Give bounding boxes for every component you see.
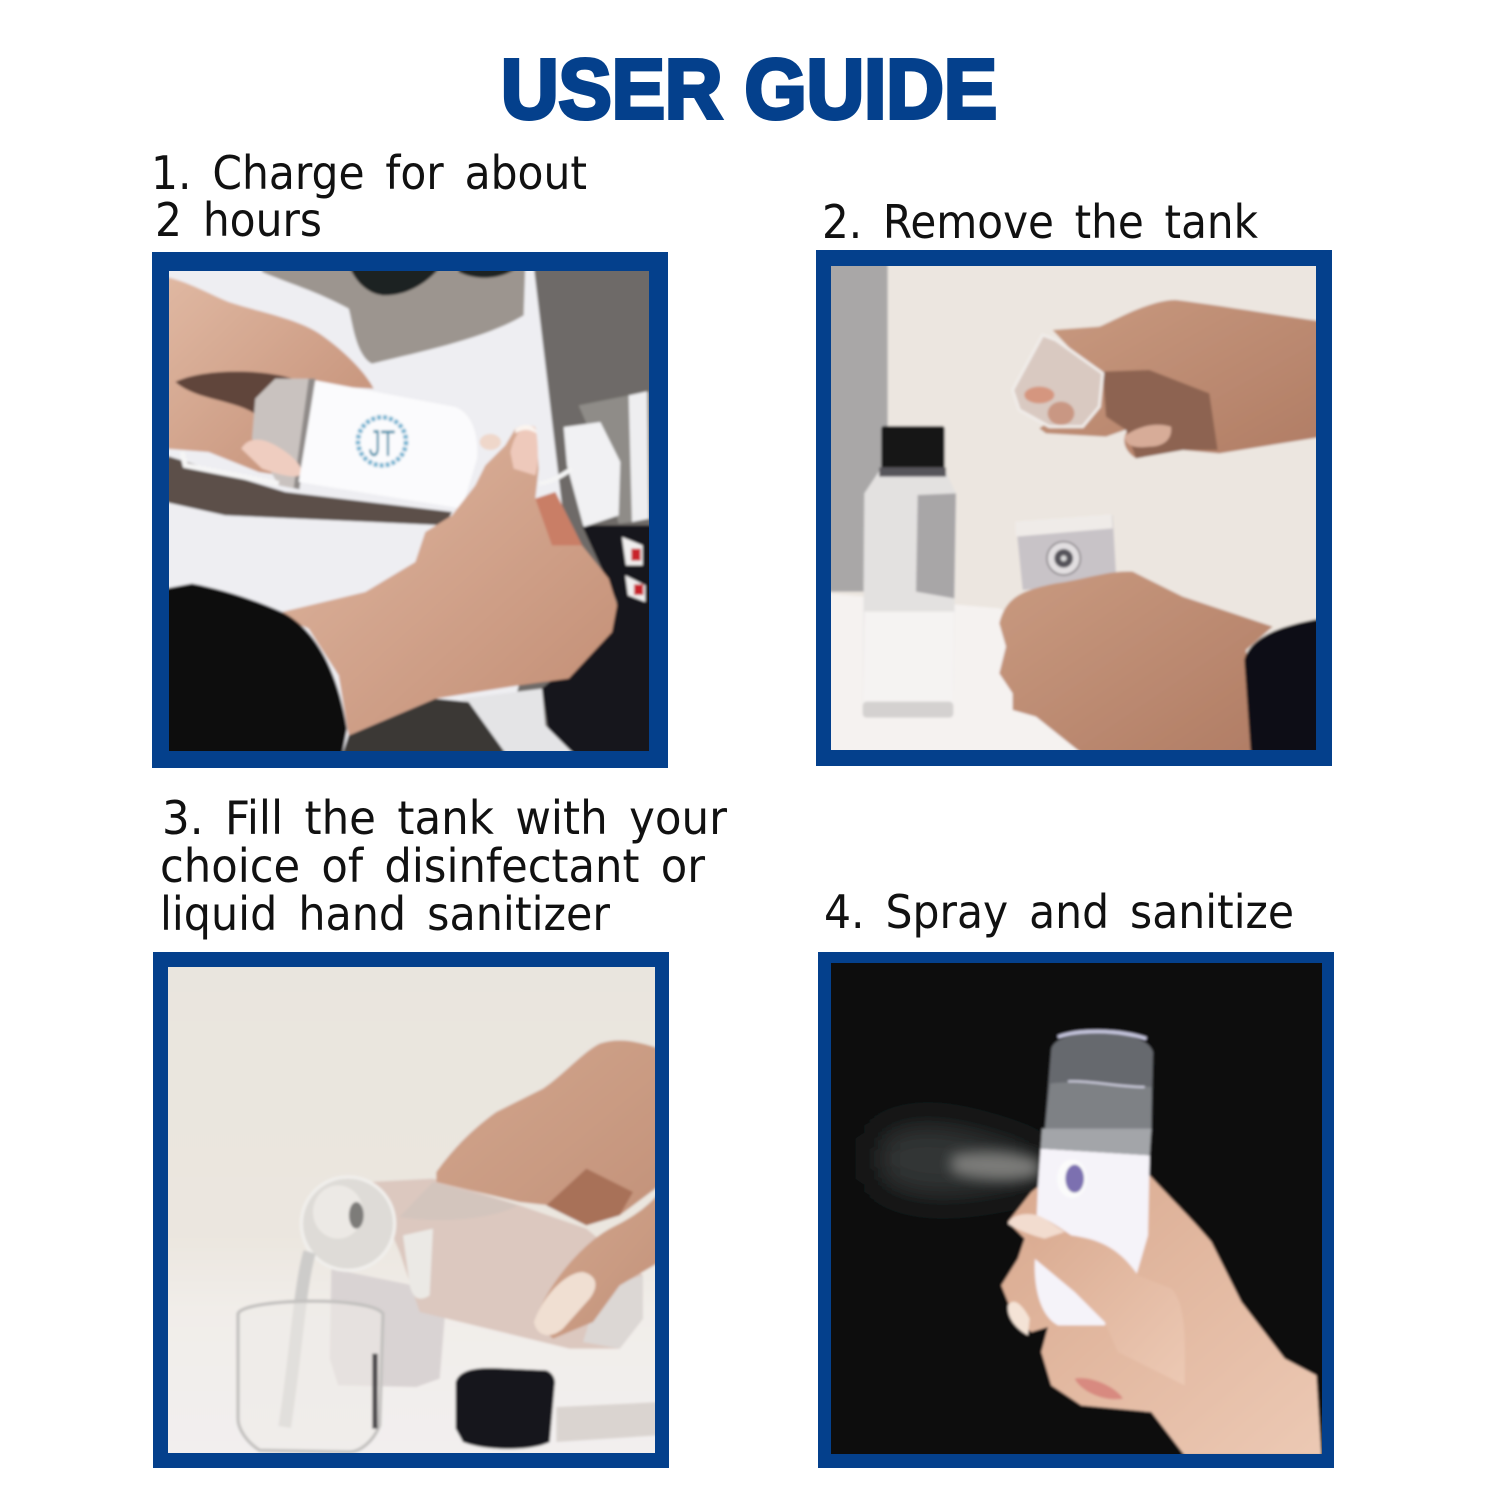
upper hand <box>165 277 374 479</box>
glass tank <box>1013 335 1103 427</box>
bottle <box>863 426 956 718</box>
heading: step 1: 2 hours <box>155 193 322 247</box>
index finger through bottle <box>405 1185 510 1218</box>
panel: step 2 photo, removing tank <box>816 250 1332 766</box>
sleeve <box>1243 618 1316 750</box>
device shadow <box>165 455 452 525</box>
device cap <box>1045 1032 1153 1132</box>
white device behind <box>330 1269 445 1387</box>
poured liquid <box>285 1252 310 1427</box>
hand behind device <box>1001 1175 1321 1455</box>
thumb <box>543 1196 655 1340</box>
bottle body <box>370 1179 643 1349</box>
logo: JT <box>369 423 395 464</box>
thumb and palm <box>1021 1214 1185 1385</box>
heading: step 3: choice of disinfectant or <box>160 839 705 893</box>
tank <box>252 379 315 489</box>
grey strip <box>826 260 888 592</box>
heading: step 2: 2. Remove the tank <box>822 195 1258 249</box>
mist <box>878 1124 1040 1197</box>
neck <box>301 1177 395 1270</box>
heading: step 3 <box>160 791 727 941</box>
shadow on table <box>262 265 525 364</box>
panel: step 4 photo, spraying <box>818 952 1334 1468</box>
strap <box>180 458 280 485</box>
cable <box>556 468 570 480</box>
lower hand <box>999 571 1273 757</box>
small fingertip <box>480 434 501 450</box>
title: USER GUIDE <box>501 42 997 136</box>
panel: step 1 photo, charging <box>152 252 668 768</box>
wall <box>516 271 649 728</box>
dark lower right <box>542 525 655 755</box>
socket <box>579 392 655 524</box>
lower hand <box>275 426 617 735</box>
black cap <box>456 1368 555 1449</box>
device <box>299 380 477 509</box>
device <box>1016 527 1116 591</box>
hand <box>436 1041 660 1225</box>
logo <box>358 417 406 465</box>
table <box>831 594 1078 750</box>
nails <box>1008 1214 1065 1239</box>
heading: step 1: 1. Charge for about <box>151 146 587 200</box>
heading: step 1 <box>151 146 587 247</box>
nail <box>241 440 303 476</box>
heading: step 4: 4. Spray and sanitize <box>824 885 1294 939</box>
glass tank <box>238 1301 383 1452</box>
heading: step 3: liquid hand sanitizer <box>160 887 610 941</box>
shadow on table <box>556 1402 660 1442</box>
device body <box>1035 1149 1150 1325</box>
heading: step 3: 3. Fill the tank with your <box>162 791 727 845</box>
nozzle <box>1057 1159 1087 1198</box>
collar <box>1041 1129 1151 1155</box>
sleeve <box>165 584 347 755</box>
upper hand <box>1039 300 1323 458</box>
panel: step 3 photo, filling tank <box>153 952 669 1468</box>
